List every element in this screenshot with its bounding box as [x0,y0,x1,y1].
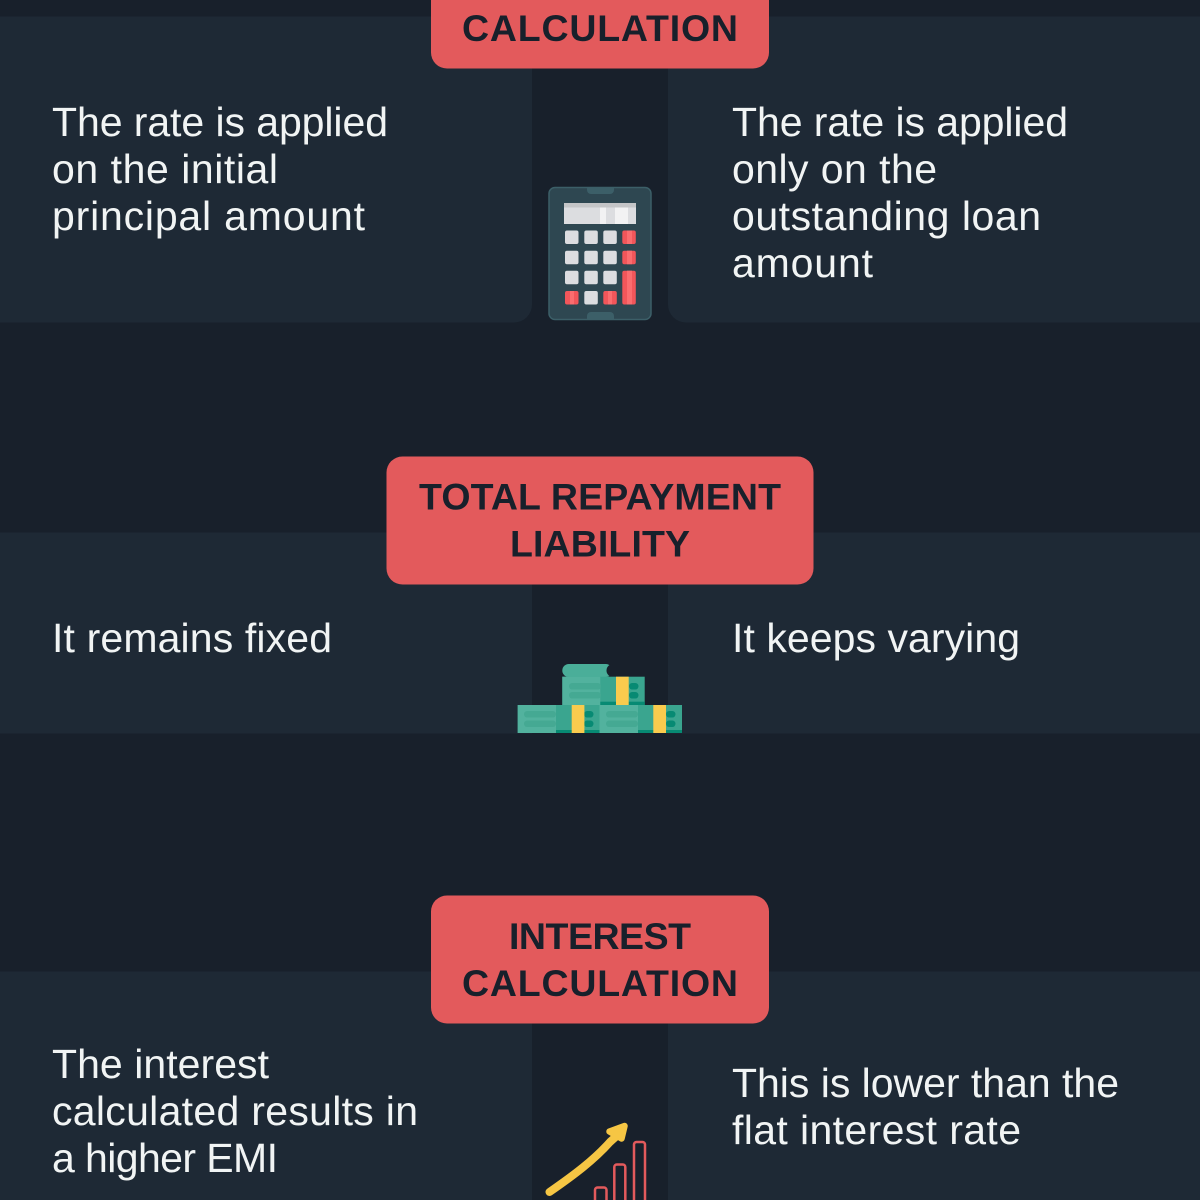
text: left interest: The interest [52,1041,270,1087]
heading badge: interest calculation: CALCULATION [462,962,738,1004]
panel: left repayment [0,532,532,734]
heading badge: total repayment liability [386,456,814,584]
text: right calculation: amount [732,240,874,286]
panel: left interest [0,972,532,1200]
text: left interest: calculated results in [52,1088,418,1134]
icon: calculator [549,187,651,320]
text: left repayment: It remains fixed [52,615,332,661]
text: right interest: flat interest rate [732,1107,1021,1153]
heading badge: total repayment liability: TOTAL REPAYMENT [419,476,781,518]
text: left calculation: The rate is applied [52,99,388,145]
section: calculation [0,0,1200,322]
text: right calculation: The rate is applied [732,99,1068,145]
text: right calculation: outstanding loan [732,193,1041,239]
panel: left calculation [0,16,532,322]
heading badge: interest calculation: INTEREST [509,915,691,957]
heading badge: calculation: CALCULATION [462,7,738,49]
heading badge: interest calculation [431,896,769,1024]
panel: right interest [668,972,1200,1200]
text: right calculation: only on the [732,146,937,192]
panel: right repayment [668,532,1200,734]
text: left calculation: principal amount [52,193,366,239]
heading badge: calculation [431,0,769,68]
text: right interest [732,1060,1119,1153]
icon: rising chart [550,1126,645,1200]
panel: right calculation [668,16,1200,322]
section: total repayment liability [0,456,1200,734]
heading badge: total repayment liability: LIABILITY [510,522,690,564]
text: left calculation [52,99,388,239]
text: right repayment: It keeps varying [732,615,1020,661]
text: right calculation [732,99,1068,286]
text: left calculation: on the initial [52,146,278,192]
text: left interest [52,1041,418,1181]
text: left interest: a higher EMI [52,1135,278,1181]
icon: money stacks [518,664,682,733]
section: interest calculation [0,896,1200,1200]
text: right interest: This is lower than the [732,1060,1119,1106]
